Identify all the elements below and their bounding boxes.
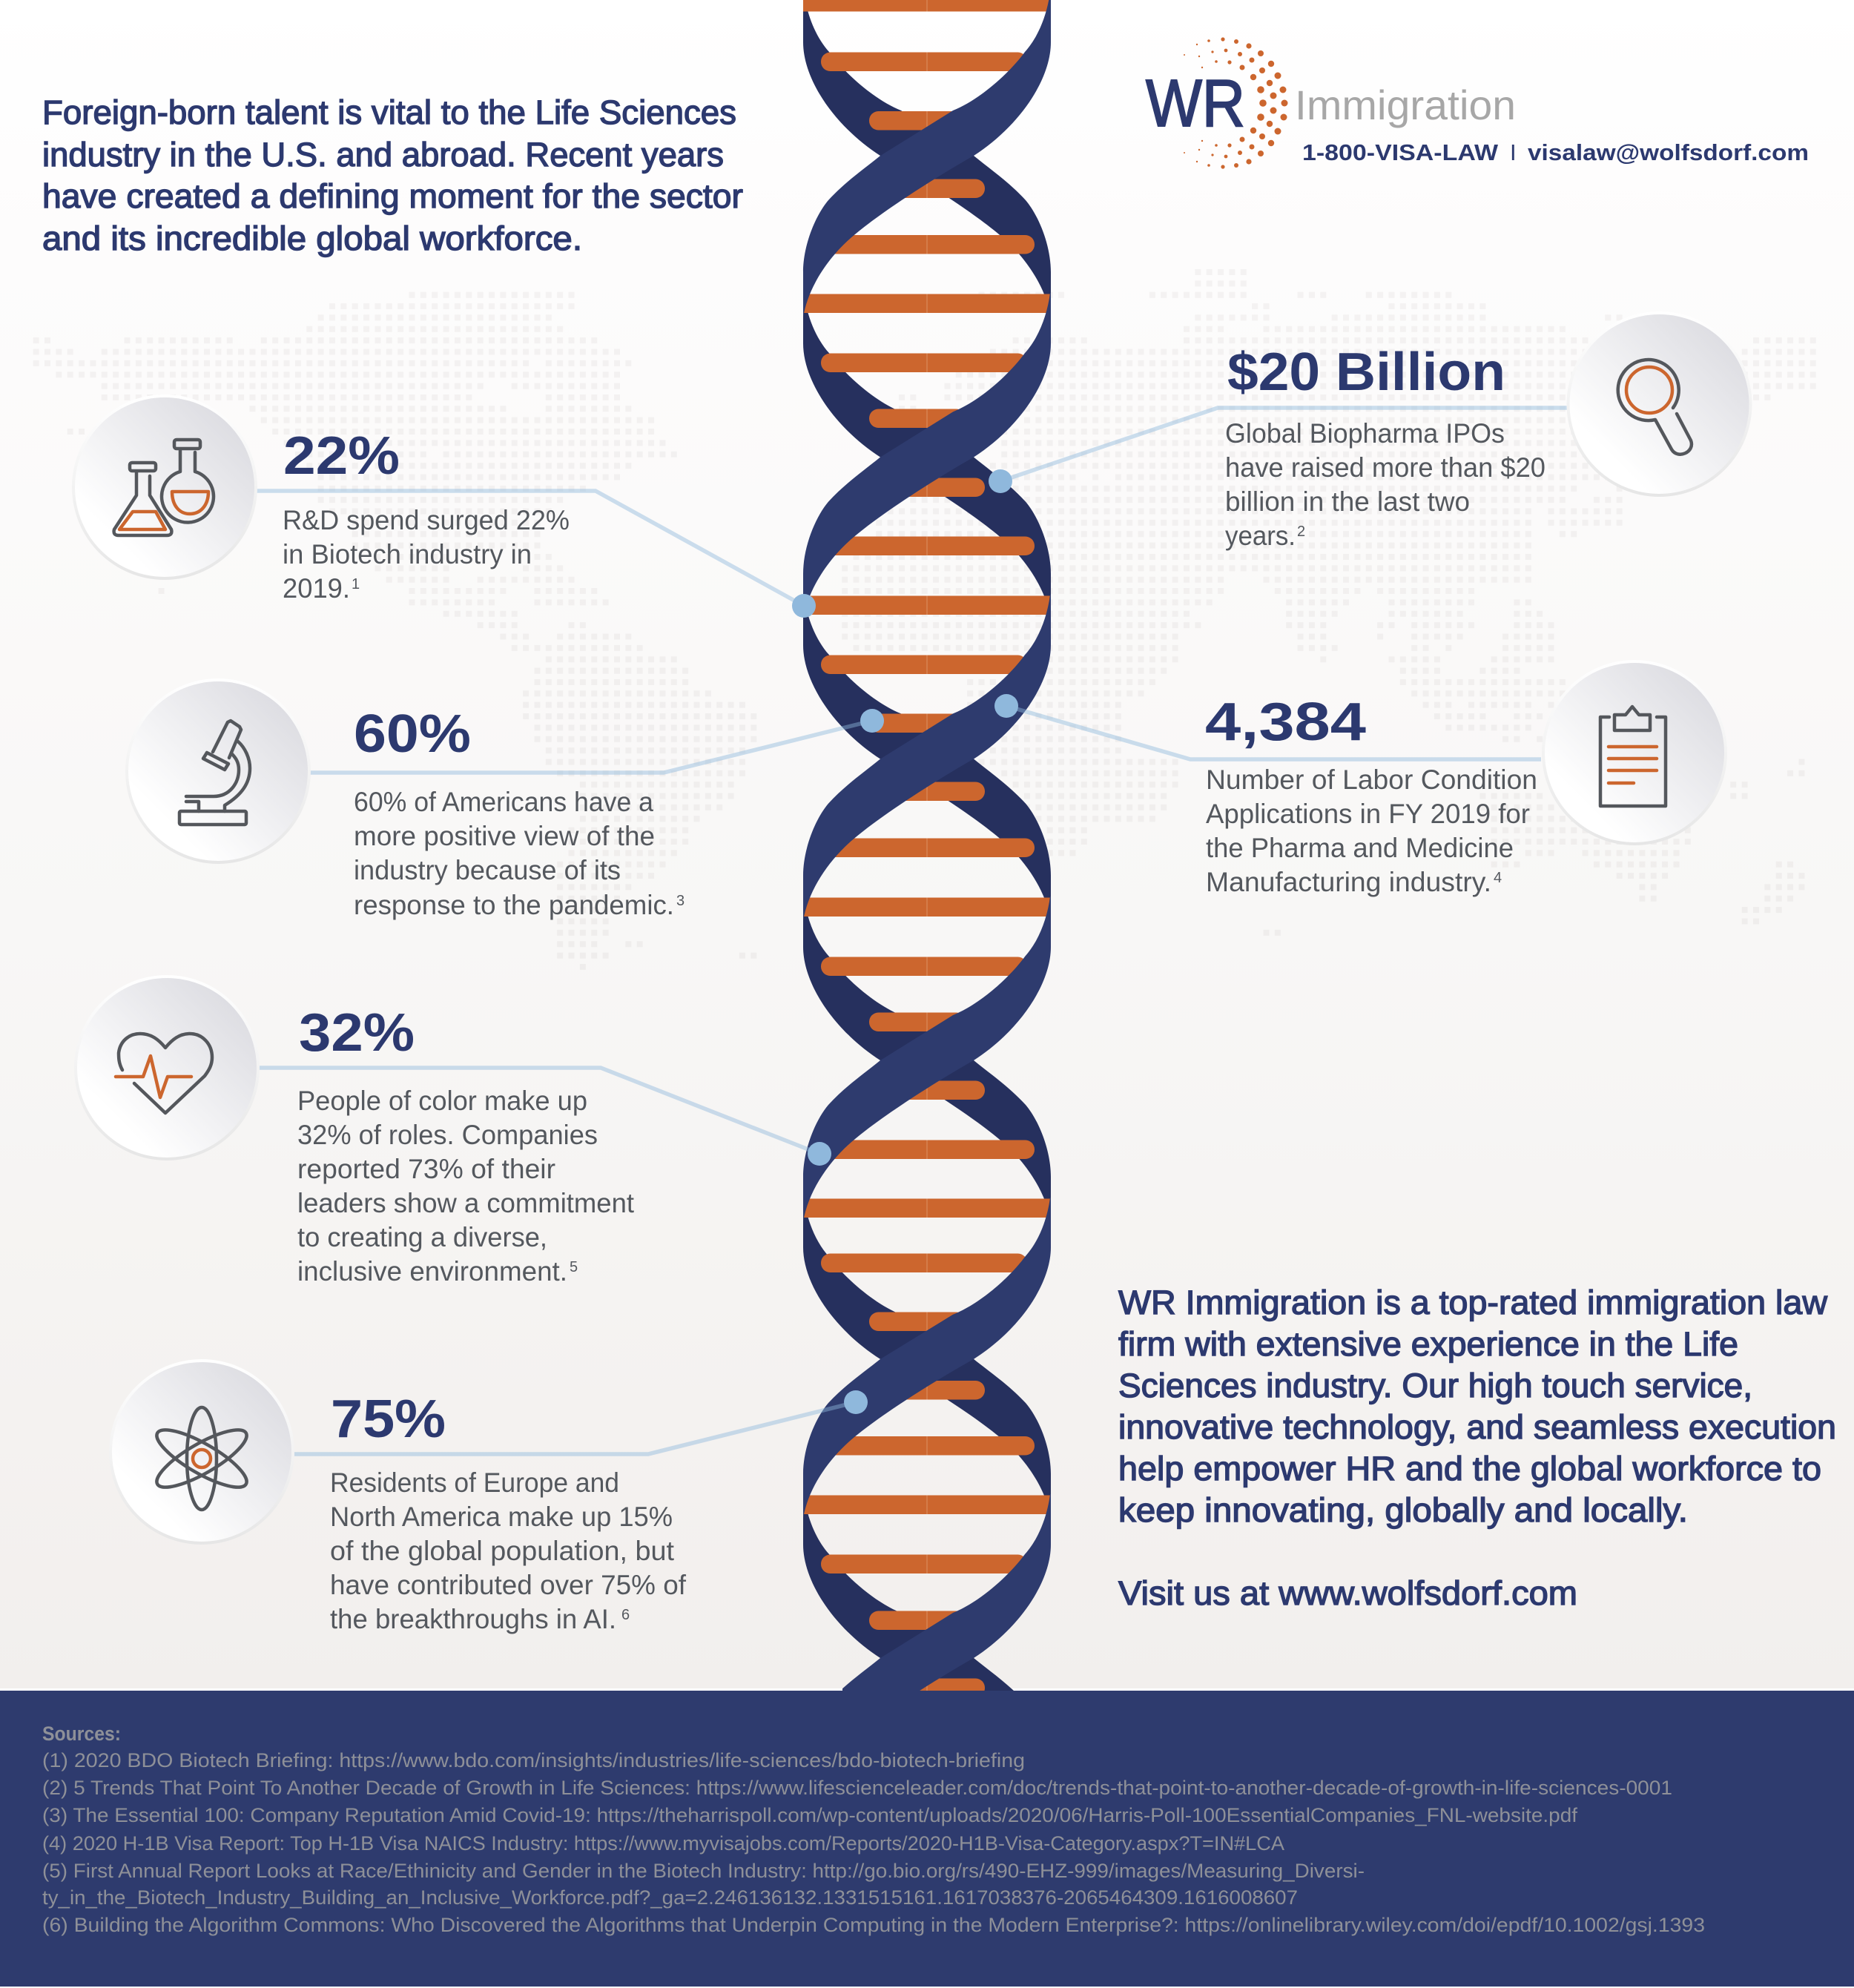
- intro heading: [42, 93, 743, 257]
- company statement: [1118, 1284, 1836, 1612]
- description: 2019.: [283, 573, 350, 604]
- description: billion in the last two: [1225, 486, 1470, 517]
- description: [297, 1086, 635, 1287]
- icon: flasks: [72, 394, 257, 580]
- company statement: keep innovating, globally and locally.: [1118, 1491, 1688, 1529]
- icon: magnifying glass: [1566, 311, 1752, 497]
- footer band: [0, 1691, 1854, 1987]
- icon: atom: [109, 1359, 294, 1545]
- sources list: (4) 2020 H-1B Visa Report: Top H-1B Visa NAICS Industry: https://www.myvisajobs.com/Reports/2020-H1B-Visa-Category.aspx?T=IN#LCA: [42, 1832, 1284, 1855]
- sources list: ty_in_the_Biotech_Industry_Building_an_Inclusive_Workforce.pdf?_ga=2.246136132.1331515161.1617038376-2065464309.1616008607: [42, 1886, 1298, 1909]
- icon: heart with pulse: [74, 975, 260, 1160]
- logo Immigration: Immigration: [1295, 82, 1516, 128]
- logo contact line: visalaw@wolfsdorf.com: [1528, 139, 1809, 165]
- description: 2: [1297, 524, 1305, 540]
- value: 75%: [331, 1390, 446, 1449]
- description: in Biotech industry in: [283, 539, 532, 569]
- description: have contributed over 75% of: [330, 1570, 687, 1600]
- description: leaders show a commitment: [297, 1188, 635, 1218]
- sources list: (6) Building the Algorithm Commons: Who Discovered the Algorithms that Underpin Computing in the Modern Enterprise?: https://onlinelibrary.wiley.com/doi/epdf/10.1002/gsj.1393: [42, 1914, 1705, 1936]
- description: 4: [1494, 870, 1502, 886]
- company statement: WR Immigration is a top-rated immigration law: [1118, 1284, 1828, 1321]
- value: 4,384: [1205, 693, 1366, 752]
- stat: 4,384 labor applications: [1205, 660, 1727, 897]
- description: Manufacturing industry.: [1206, 867, 1491, 897]
- front strand: [803, 0, 1051, 1820]
- company statement: Sciences industry. Our high touch service,: [1118, 1367, 1752, 1404]
- value: 32%: [299, 1003, 415, 1063]
- stat: 75% AI breakthroughs: [109, 1359, 687, 1634]
- description: [330, 1467, 687, 1634]
- company statement: firm with extensive experience in the Life: [1118, 1325, 1738, 1363]
- stat: 22% R&D: [72, 394, 570, 604]
- description: the breakthroughs in AI.: [330, 1604, 616, 1634]
- sources list: (2) 5 Trends That Point To Another Decade of Growth in Life Sciences: https://www.lifescienceleader.com/doc/trends-that-point-to-another-decade-of-growth-in-life-sciences-0001: [42, 1777, 1672, 1799]
- description: People of color make up: [297, 1086, 587, 1116]
- description: [283, 505, 570, 604]
- sources list: Sources:: [42, 1723, 121, 1745]
- value: 22%: [283, 426, 400, 486]
- company statement: help empower HR and the global workforce to: [1118, 1450, 1821, 1487]
- intro heading: and its incredible global workforce.: [42, 219, 582, 257]
- description: years.: [1225, 521, 1296, 551]
- connector lines: [257, 408, 1569, 1454]
- logo contact line: 1-800-VISA-LAW: [1302, 139, 1499, 165]
- connector end dots: [792, 469, 1018, 1414]
- dotted world map: [33, 272, 1816, 967]
- description: to creating a diverse,: [297, 1222, 547, 1252]
- description: [1225, 418, 1545, 551]
- intro heading: industry in the U.S. and abroad. Recent years: [42, 136, 724, 174]
- icon: clipboard: [1542, 660, 1727, 845]
- description: have raised more than $20: [1225, 452, 1545, 483]
- stat: 60% public view: [125, 678, 684, 920]
- logo: WR Immigration: [1146, 37, 1809, 169]
- sources list: (1) 2020 BDO Biotech Briefing: https://www.bdo.com/insights/industries/life-sciences/bdo-biotech-briefing: [42, 1749, 1025, 1771]
- sources list: (5) First Annual Report Looks at Race/Ethinicity and Gender in the Biotech Industry: http://go.bio.org/rs/490-EHZ-999/images/Measuring_Diversi-: [42, 1860, 1365, 1882]
- back strand: [803, 0, 1051, 1820]
- description: 1: [352, 576, 360, 592]
- description: 60% of Americans have a: [354, 787, 653, 817]
- description: North America make up 15%: [330, 1502, 673, 1532]
- intro heading: have created a defining moment for the sector: [42, 177, 743, 215]
- description: 6: [621, 1607, 630, 1623]
- description: [1206, 765, 1537, 897]
- description: industry because of its: [354, 855, 621, 885]
- footer white gap: [0, 1688, 842, 1691]
- logo contact line: I: [1510, 139, 1517, 165]
- description: [354, 787, 684, 920]
- description: 32% of roles. Companies: [297, 1120, 598, 1150]
- description: 3: [676, 893, 684, 909]
- description: more positive view of the: [354, 821, 655, 851]
- description: R&D spend surged 22%: [283, 505, 570, 535]
- description: the Pharma and Medicine: [1206, 833, 1514, 863]
- sources footer: [0, 1691, 1854, 1987]
- description: Global Biopharma IPOs: [1225, 418, 1505, 449]
- sources list: [42, 1723, 1705, 1936]
- value: 60%: [354, 704, 471, 764]
- description: of the global population, but: [330, 1536, 675, 1566]
- company statement: innovative technology, and seamless execution: [1118, 1408, 1836, 1446]
- footer white gap right: [1015, 1688, 1854, 1691]
- logo WR: WR: [1146, 67, 1245, 141]
- value: $20 Billion: [1227, 343, 1505, 402]
- logo contact line: [1302, 139, 1809, 165]
- description: reported 73% of their: [297, 1154, 555, 1184]
- dna double helix: [803, 0, 1051, 1820]
- description: Applications in FY 2019 for: [1206, 799, 1530, 829]
- description: Number of Labor Condition: [1206, 765, 1537, 795]
- intro heading: Foreign-born talent is vital to the Life Sciences: [42, 93, 736, 131]
- company statement: Visit us at www.wolfsdorf.com: [1118, 1574, 1577, 1612]
- description: Residents of Europe and: [330, 1467, 619, 1498]
- orange base pairs: [803, 0, 1051, 1697]
- description: response to the pandemic.: [354, 890, 674, 920]
- logo dot ring: [1184, 37, 1287, 169]
- icon: microscope: [125, 678, 311, 864]
- sources list: (3) The Essential 100: Company Reputation Amid Covid-19: https://theharrispoll.com/wp-content/uploads/2020/06/Harris-Poll-100EssentialCompanies_FNL-website.pdf: [42, 1804, 1578, 1826]
- description: inclusive environment.: [297, 1256, 567, 1287]
- stat: $20 Billion IPOs: [1225, 311, 1752, 551]
- description: 5: [570, 1259, 578, 1275]
- stat: 32% people of color: [74, 975, 635, 1287]
